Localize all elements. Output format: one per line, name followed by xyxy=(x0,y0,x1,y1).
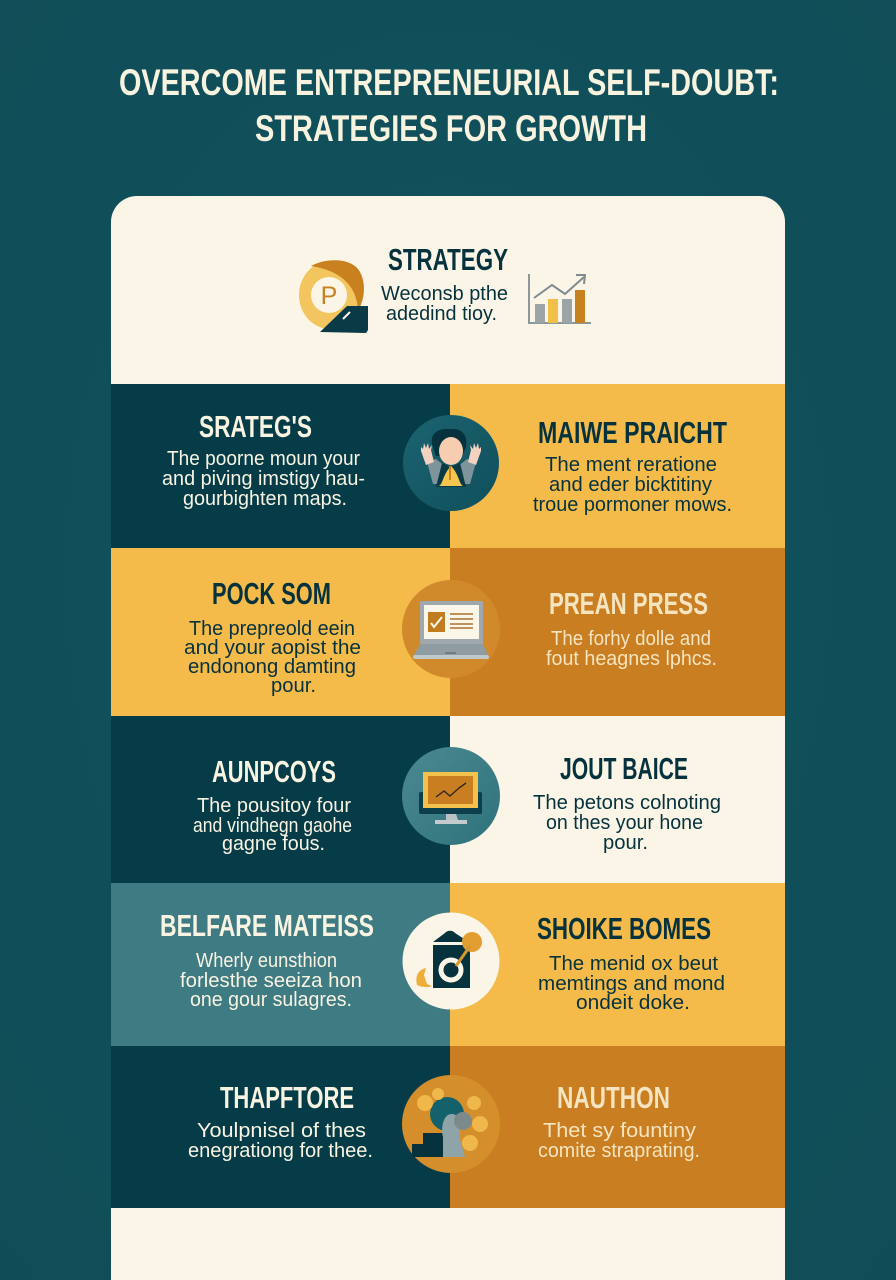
panel: row 5 left: enegrationg for thee. xyxy=(188,1140,373,1162)
panel: row 2 left: POCK SOM xyxy=(212,576,331,611)
panel: row 4 right: SHOIKE BOMES xyxy=(537,911,711,946)
panel: row 4 right: ondeit doke. xyxy=(576,992,690,1014)
icon: badge with hand: P xyxy=(321,282,337,310)
panel: row 5 right: comite straprating. xyxy=(538,1140,700,1162)
panel: row 4 left: one gour sulagres. xyxy=(190,989,352,1011)
icon: figure with flowers and stairs xyxy=(402,1075,500,1173)
panel: row 2 left xyxy=(184,576,361,697)
text: strategy description: adedind tioy. xyxy=(386,303,497,325)
panel: row 4 right xyxy=(537,911,725,1014)
panel: row 3 right: on thes your hone xyxy=(546,812,703,834)
panel: main card xyxy=(111,196,785,1280)
panel: row 2 left: The prepreold eein xyxy=(189,618,355,640)
panel: row 1 right: MAIWE PRAICHT xyxy=(538,415,727,450)
icon: laptop checklist xyxy=(402,580,500,678)
panel: row 2 right: PREAN PRESS xyxy=(549,586,708,621)
panel: row 3 right: The petons colnoting xyxy=(533,792,721,814)
icon: badge with hand xyxy=(299,260,368,333)
panel: row 5 right xyxy=(538,1080,700,1162)
icon: person with raised hands xyxy=(403,415,499,511)
panel: row 5 right: Thet sy fountiny xyxy=(543,1120,696,1142)
panel: row 2 left: pour. xyxy=(271,675,316,697)
text: strategy description: Weconsb pthe xyxy=(381,283,508,305)
panel: row 2 left: and your aopist the xyxy=(184,637,361,659)
panel: row 3 left xyxy=(193,754,352,855)
panel: row 3 left: AUNPCOYS xyxy=(212,754,336,789)
panel: row 4 left: BELFARE MATEISS xyxy=(160,908,374,943)
heading: strategy: STRATEGY xyxy=(388,242,508,277)
panel: row 2 right xyxy=(546,586,717,670)
icon: bag with keys xyxy=(402,912,500,1010)
panel: row 1 left xyxy=(162,409,365,510)
icon: bar chart with arrow xyxy=(529,274,591,323)
panel: row 2 right: The forhy dolle and xyxy=(551,628,711,650)
panel: row 1 left: SRATEG'S xyxy=(199,409,312,444)
title xyxy=(119,62,779,149)
panel: row 3 left: The pousitoy four xyxy=(197,795,351,817)
panel: row 1 left: and piving imstigy hau- xyxy=(162,468,365,490)
panel: row 2 right: fout heagnes lphcs. xyxy=(546,648,717,670)
panel: row 3 left: and vindhegn gaohe xyxy=(193,815,352,837)
panel: row backgrounds xyxy=(111,384,785,1208)
panel: row 1 left: gourbighten maps. xyxy=(183,488,347,510)
panel: row 4 right: memtings and mond xyxy=(538,973,725,995)
icon: monitor with trend line xyxy=(402,747,500,845)
panel: row 5 left: THAPFTORE xyxy=(220,1080,354,1115)
panel: row 3 right: JOUT BAICE xyxy=(560,751,688,786)
panel: row 4 left: Wherly eunsthion xyxy=(196,950,337,972)
panel: row 1 left: The poorne moun your xyxy=(167,448,360,470)
panel: row 1 right xyxy=(533,415,732,516)
panel: row 5 left xyxy=(188,1080,373,1162)
panel: row 3 right: pour. xyxy=(603,832,648,854)
panel: row 1 right: troue pormoner mows. xyxy=(533,494,732,516)
panel: row 1 right: and eder bicktitiny xyxy=(549,474,712,496)
panel: row 3 right xyxy=(533,751,721,854)
panel: row 5 right: NAUTHON xyxy=(557,1080,670,1115)
text: strategy description xyxy=(381,283,508,325)
panel: row 4 left xyxy=(160,908,374,1011)
panel: row 1 right: The ment reratione xyxy=(545,454,717,476)
panel: row 2 left: endonong damting xyxy=(188,656,356,678)
panel: row 4 left: forlesthe seeiza hon xyxy=(180,970,362,992)
title: STRATEGIES FOR GROWTH xyxy=(255,108,647,149)
panel: row 3 left: gagne fous. xyxy=(222,833,325,855)
panel: row 5 left: Youlpnisel of thes xyxy=(197,1120,366,1142)
panel: row 4 right: The menid ox beut xyxy=(549,953,718,975)
panel: strategy header xyxy=(299,242,591,333)
